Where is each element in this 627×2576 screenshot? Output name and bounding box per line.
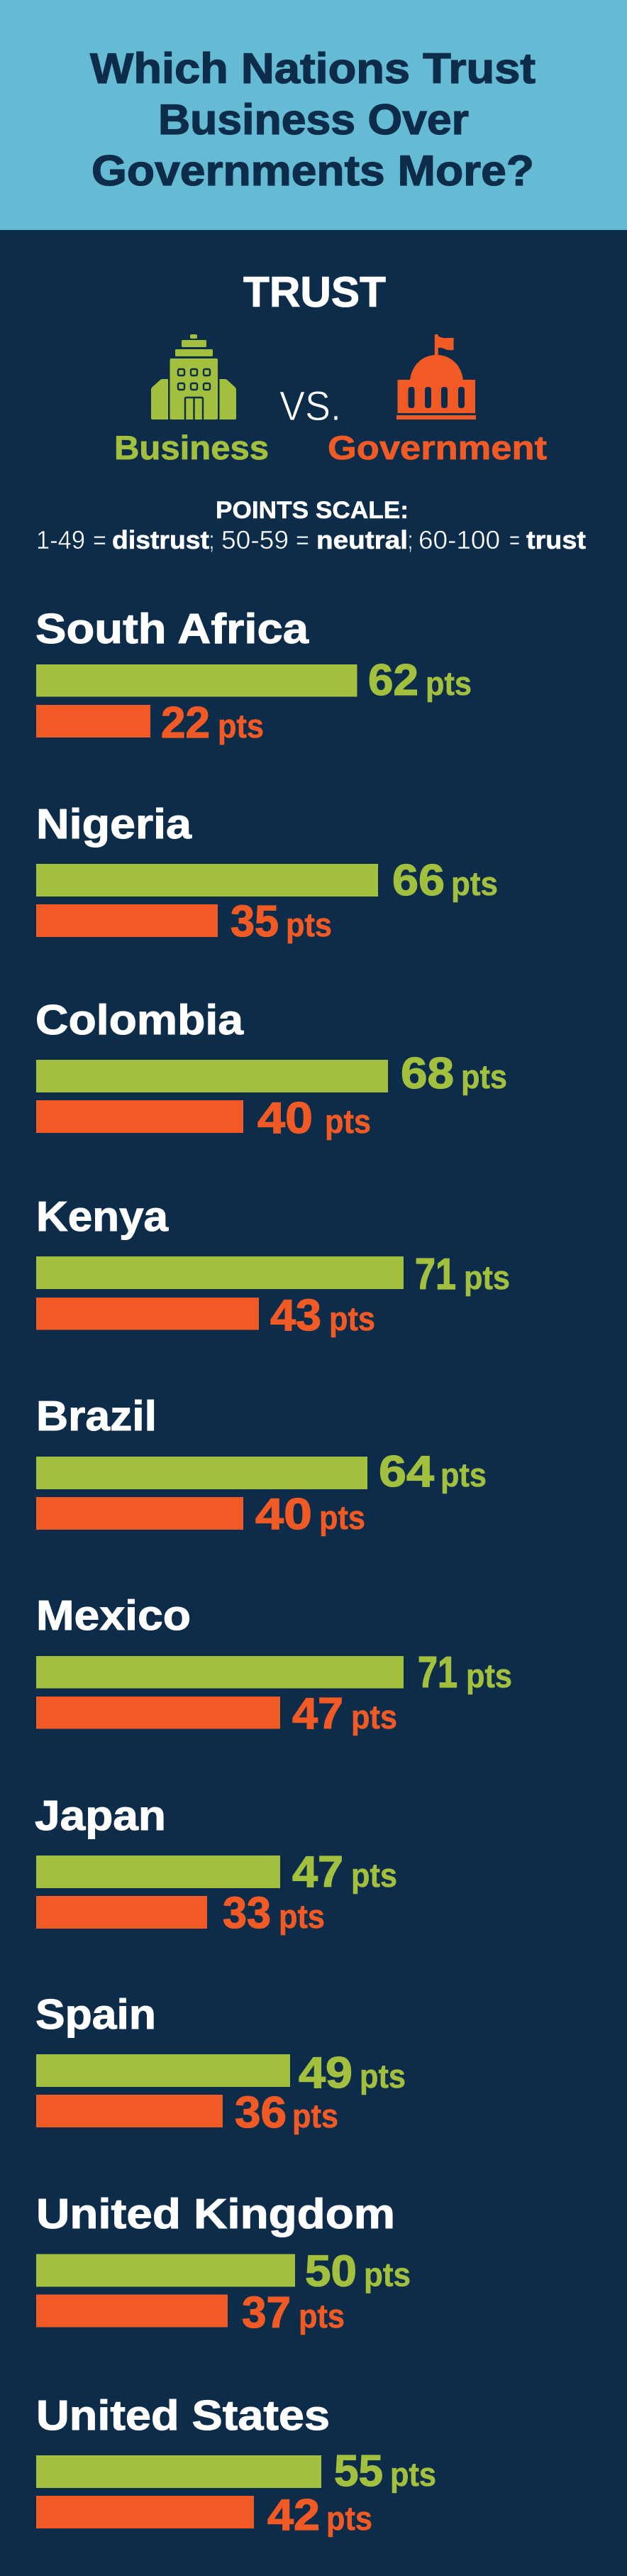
text: vs.: VS. (279, 383, 341, 429)
business value (418, 1648, 512, 1697)
business bar 68 (36, 1060, 388, 1092)
government value: pts (351, 1698, 397, 1736)
government value: pts (325, 1102, 371, 1140)
business value (401, 1049, 507, 1098)
country: Brazil: Brazil (36, 1393, 157, 1440)
country: Colombia: Colombia (35, 997, 244, 1043)
government value (223, 1889, 325, 1938)
government value: 35 (231, 897, 279, 946)
government bar 35 (36, 904, 218, 937)
business value (299, 2049, 406, 2098)
icon: government capitol (396, 334, 476, 420)
country: Mexico: Mexico (36, 1592, 191, 1639)
government bar 37 (36, 2294, 228, 2327)
government value: 36 (235, 2088, 287, 2137)
government value (242, 2289, 345, 2337)
business value: pts (390, 2455, 436, 2493)
title: Governments More? (91, 147, 534, 194)
business bar 66 (36, 864, 378, 897)
business value: 68 (401, 1049, 454, 1098)
business value (379, 1447, 487, 1496)
business value: pts (426, 664, 472, 702)
title: Business Over (158, 96, 469, 143)
country: Kenya: Kenya (36, 1193, 169, 1240)
business value (392, 856, 498, 905)
country: Japan: Japan (35, 1792, 166, 1839)
points scale legend: ; (209, 525, 214, 554)
label: business: Business (114, 429, 269, 466)
country: United Kingdom (36, 2191, 411, 2337)
points scale legend: = (509, 525, 520, 554)
business bar 62 (36, 664, 357, 697)
country: South Africa (35, 605, 472, 747)
business value (368, 656, 472, 705)
business bar 50 (36, 2254, 295, 2287)
government value (255, 1490, 365, 1539)
business value: pts (440, 1456, 487, 1493)
country: Japan (35, 1792, 397, 1938)
title: Which Nations Trust (90, 45, 536, 92)
points scale legend: POINTS SCALE: (216, 497, 409, 524)
business bar 71 (36, 1256, 404, 1289)
government value (235, 2088, 338, 2137)
government bar 36 (36, 2095, 223, 2127)
business bar 55 (36, 2455, 321, 2488)
country: United States: United States (36, 2392, 330, 2439)
business value (334, 2447, 436, 2496)
business value: 64 (379, 1447, 435, 1496)
business value: 55 (334, 2447, 383, 2496)
points scale legend: ; (408, 525, 413, 554)
points scale legend: = (93, 525, 106, 554)
government value: pts (299, 2297, 345, 2335)
points scale legend: = (296, 525, 309, 554)
business value (292, 1848, 397, 1897)
points scale legend: distrust (112, 525, 209, 554)
business value: pts (351, 1856, 397, 1894)
business value: 49 (299, 2049, 353, 2098)
government value (231, 897, 332, 946)
points scale legend: 60-100 (418, 525, 500, 554)
government value (270, 1291, 375, 1340)
country: Spain (35, 1991, 406, 2137)
country: Kenya (36, 1193, 510, 1340)
government value: pts (286, 906, 332, 943)
country: South Africa: South Africa (35, 605, 309, 652)
business bar 64 (36, 1457, 367, 1489)
business value: 71 (418, 1648, 457, 1697)
business value (305, 2247, 411, 2296)
country: Brazil (36, 1393, 487, 1539)
country: United States (36, 2392, 436, 2540)
government value: pts (292, 2097, 338, 2134)
business value: pts (461, 1058, 507, 1095)
government bar 40 (36, 1100, 243, 1133)
business value: 50 (305, 2247, 357, 2296)
country: Nigeria (36, 801, 498, 946)
government value: 37 (242, 2289, 291, 2337)
government value: pts (329, 1300, 375, 1337)
government value: 33 (223, 1889, 271, 1938)
government value: 40 (257, 1094, 313, 1143)
government value (257, 1094, 371, 1143)
header banner with title (0, 0, 627, 230)
business value: 62 (368, 656, 418, 705)
business bar 47 (36, 1856, 280, 1888)
government value: pts (326, 2499, 372, 2537)
heading: trust: TRUST (243, 268, 386, 316)
business value (415, 1250, 510, 1299)
government bar 47 (36, 1697, 280, 1729)
government value (292, 1689, 397, 1738)
country: Mexico (36, 1592, 512, 1738)
government value: 42 (267, 2491, 320, 2540)
government bar 33 (36, 1896, 207, 1929)
business value: pts (364, 2256, 411, 2293)
government value: pts (218, 707, 264, 745)
government bar 43 (36, 1298, 259, 1330)
business value: 47 (292, 1848, 343, 1897)
government bar 40 (36, 1497, 243, 1530)
country: United Kingdom: United Kingdom (36, 2191, 395, 2237)
points scale legend (36, 497, 586, 554)
business value: pts (360, 2057, 406, 2095)
business value: pts (464, 1259, 510, 1296)
business value: pts (466, 1657, 512, 1694)
government value: 22 (161, 698, 210, 747)
government value: pts (319, 1498, 365, 1536)
points scale legend: 50-59 (221, 525, 289, 554)
business bar 49 (36, 2054, 290, 2087)
government bar 22 (36, 705, 150, 738)
government value: pts (279, 1897, 325, 1935)
business value: 66 (392, 856, 445, 905)
government value: 43 (270, 1291, 321, 1340)
government value (267, 2491, 372, 2540)
country: Colombia (35, 997, 507, 1143)
government value: 40 (255, 1490, 312, 1539)
business value: 71 (415, 1250, 456, 1299)
government value: 47 (292, 1689, 343, 1738)
government bar 42 (36, 2496, 254, 2528)
points scale legend: neutral (316, 525, 408, 554)
government value (161, 698, 264, 747)
points scale legend: trust (526, 525, 586, 554)
icon: business building (151, 334, 236, 420)
business value: pts (451, 865, 498, 902)
label: government: Government (328, 429, 547, 466)
business bar 71 (36, 1656, 404, 1688)
points scale legend: 1-49 (36, 525, 85, 554)
country: Nigeria: Nigeria (36, 801, 192, 848)
title (90, 45, 536, 194)
country: Spain: Spain (35, 1991, 156, 2038)
